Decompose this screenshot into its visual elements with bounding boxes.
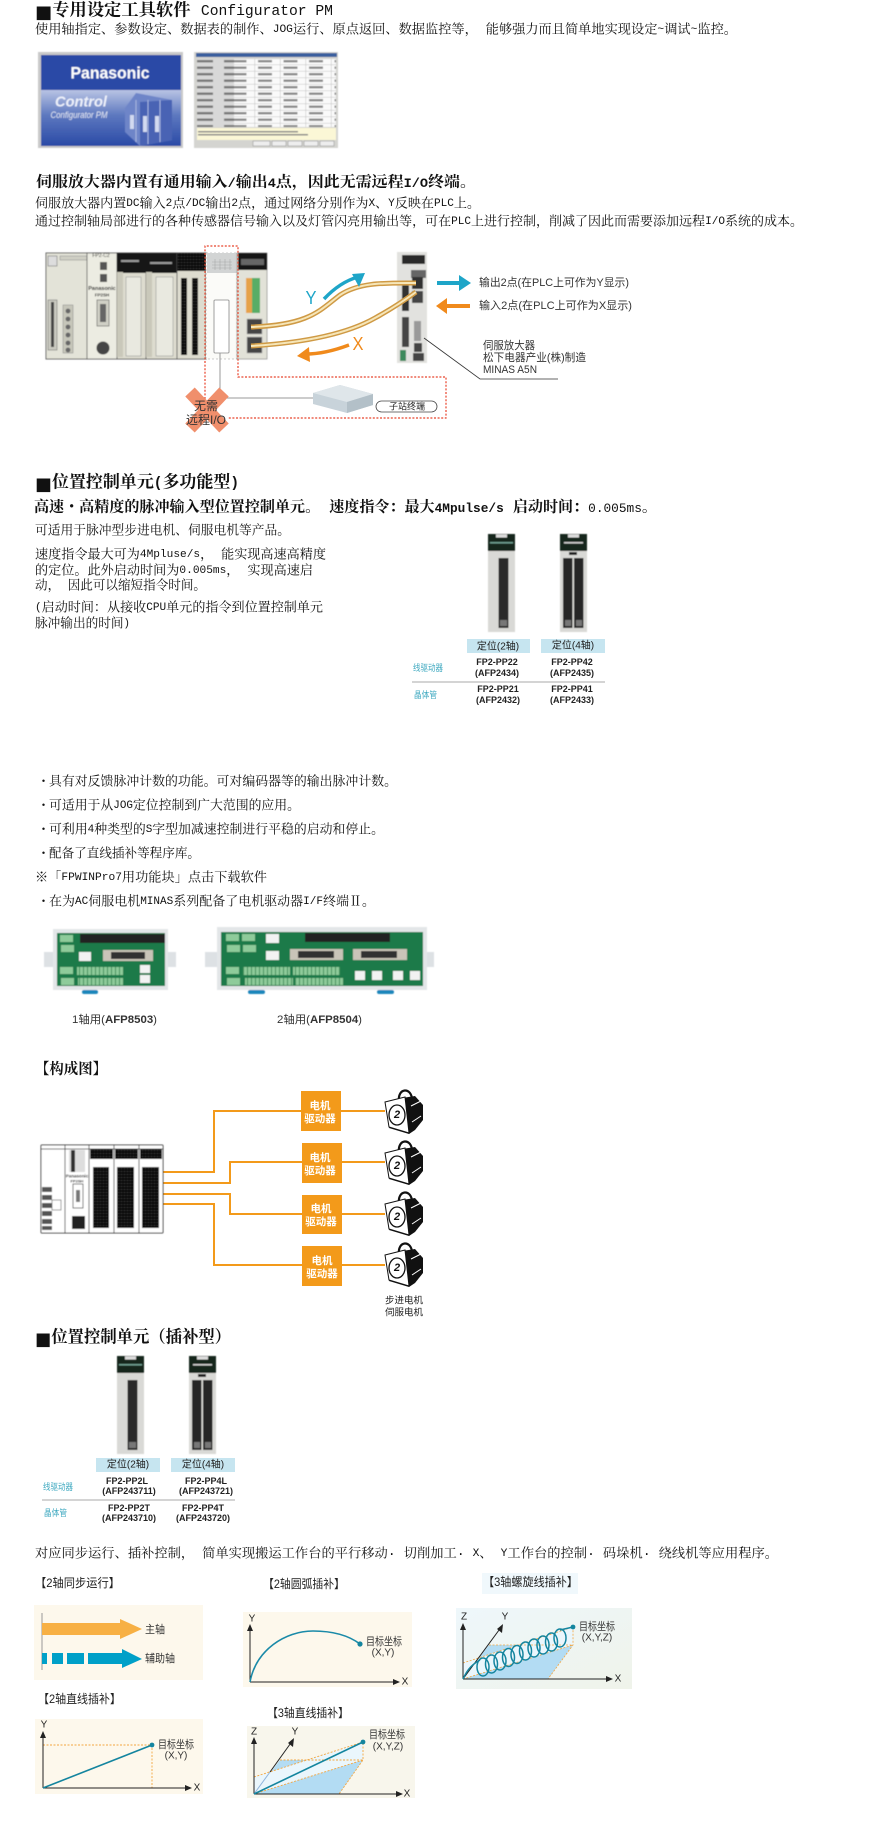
motor driver 4: [302, 1246, 342, 1286]
text: speed description: 动， 因此可以缩短指令时间。: [35, 578, 206, 594]
text: speed description: 速度指令最大可为4Mpluse/s， 能实现高速高精度: [35, 546, 326, 562]
heading: Configurator PM: ■专用设定工具软件 Configurator PM: [35, 0, 333, 24]
icon: motor 2: 2: [393, 1160, 400, 1172]
panel: 2-axis linear interpolation: 【2轴直线插补】: [38, 1691, 121, 1706]
module photo: 4-axis: [189, 1356, 216, 1454]
image: Panasonic Control Configurator PM package: [38, 52, 183, 148]
row: line driver: [43, 1476, 233, 1496]
motor driver 2: [302, 1143, 342, 1183]
motor driver 1: 电机: [310, 1099, 331, 1112]
motor driver 2: 驱动器: [304, 1164, 336, 1177]
panel: 3-axis helical interpolation: (X,Y,Z): [582, 1632, 612, 1644]
arrow: auxiliary axis: [42, 1649, 142, 1668]
panel: 3-axis linear interpolation: Z: [251, 1726, 257, 1738]
servo amplifier: [397, 252, 427, 363]
diagram: PLC to servo amplifier wiring: [46, 246, 632, 428]
panel: 3-axis helical interpolation: [456, 1573, 632, 1689]
heading: servo amplifier I/O: 伺服放大器内置有通用输入 /输出4点，因此无需远程 I/O终端。: [36, 172, 476, 192]
text: startup time note: [35, 600, 323, 632]
caption: motor types: 伺服电机: [385, 1306, 423, 1318]
caption: motor types: 步进电机: [385, 1294, 423, 1306]
panel: 3-axis linear interpolation: (X,Y,Z): [373, 1742, 403, 1752]
PLC: Panasonic: [66, 1174, 89, 1178]
white module with dashed outline: [206, 253, 237, 359]
tag: 4-axis: [541, 638, 605, 653]
arrow: Y output: [306, 273, 365, 308]
connector lines and red dashed boundary: [205, 246, 446, 418]
panel: 3-axis helical interpolation: X: [615, 1674, 622, 1684]
motor driver 1: 驱动器: [304, 1112, 336, 1125]
row: transistor: FP2-PP2T: [108, 1503, 151, 1513]
tag: 2-axis: 定位(2轴): [477, 640, 519, 652]
panel: 3-axis helical interpolation: Y: [502, 1612, 509, 1622]
row: transistor: FP2-PP21: [477, 684, 519, 694]
callout: servo amplifier model: 松下电器产业(株)制造: [483, 350, 586, 364]
icon: motor 1: 2: [393, 1109, 400, 1121]
callout: servo amplifier model: MINAS A5N: [483, 364, 537, 376]
feature list: 可适用于从JOG定位控制到广大范围的应用。: [49, 798, 300, 814]
module photo: 4-axis: [560, 534, 587, 632]
motor driver 1: [301, 1091, 341, 1131]
text: startup time note: 脉冲输出的时间): [35, 616, 130, 632]
PLC: FP2SH: [71, 1178, 84, 1184]
wiring: [163, 1111, 385, 1265]
text: speed description: 的定位。此外启动时间为0.005ms， 实现高速启: [35, 562, 313, 578]
PLC rack: Panasonic: [88, 286, 116, 292]
callout: servo amplifier model: 伺服放大器: [483, 338, 535, 352]
motor driver 3: 电机: [310, 1202, 332, 1215]
image: Panasonic Control Configurator PM package: Panasonic: [70, 64, 150, 82]
panel: 3-axis helical interpolation: Z: [461, 1612, 467, 1622]
feature list: 在为AC伺服电机MINAS系列配备了电机驱动器I/F终端Ⅱ。: [49, 894, 375, 910]
motor driver 3: 驱动器: [305, 1215, 337, 1228]
motor driver 3: [302, 1195, 342, 1234]
icon: no remote I/O cross: 远程I/O: [186, 412, 226, 427]
product table: interpolation units: [42, 1356, 235, 1523]
arrow: Y output: Y: [306, 288, 316, 308]
panel: 2-axis arc interpolation: (X,Y): [372, 1648, 394, 1658]
text: speed description: [35, 546, 326, 594]
text: interpolation applications: 对应同步运行、插补控制， 简单实现搬运工作台的平行移动· 切削加工· X、 Y工作台的控制· 码垛机· 绕线机等应用程序。: [35, 1546, 778, 1562]
tag: 4-axis: 定位(4轴): [182, 1458, 224, 1470]
caption: 2-axis board: 2轴用(AFP8504): [277, 1012, 362, 1026]
panel: 2-axis linear interpolation: Y: [41, 1720, 48, 1730]
icon: no remote I/O cross: [186, 392, 226, 428]
row: transistor: [414, 684, 594, 705]
panel: 2-axis linear interpolation: (X,Y): [165, 1750, 187, 1762]
panel: 2-axis linear interpolation: 目标坐标: [158, 1737, 194, 1751]
arrow: main axis: [42, 1619, 142, 1639]
icon: motor 3: 2: [393, 1211, 400, 1223]
label: main axis: 主轴: [145, 1622, 165, 1636]
row: line driver: 线驱动器: [43, 1481, 73, 1492]
motor driver 4: 驱动器: [306, 1267, 338, 1280]
terminal board: 1-axis: [44, 929, 176, 994]
arrow: X input: [297, 334, 364, 362]
tag: 4-axis: [171, 1458, 235, 1472]
panel: 2-axis linear interpolation: [35, 1691, 203, 1794]
panel: 3-axis linear interpolation: X: [404, 1788, 411, 1800]
text: input label: 输入2点(在PLC上可作为X显示): [479, 298, 632, 312]
feature list: ・: [37, 798, 50, 814]
panel: 2-axis arc interpolation: X: [402, 1676, 409, 1688]
feature list: 可利用4种类型的S字型加减速控制进行平稳的启动和停止。: [49, 822, 384, 838]
cables: [251, 283, 416, 346]
callout: servo amplifier model: [424, 338, 586, 379]
arrow: X input: X: [352, 334, 364, 354]
PLC: [41, 1145, 163, 1233]
image: Panasonic Control Configurator PM package: Control: [55, 94, 108, 110]
feature list: ・: [37, 846, 50, 862]
terminal board: 2-axis: [205, 927, 434, 994]
image: Panasonic Control Configurator PM package: Configurator PM: [50, 110, 108, 120]
feature list: ※「FPWINPro7用功能块」点击下载软件: [35, 870, 267, 886]
row: line driver: (AFP243721): [179, 1486, 233, 1496]
product table: multifunction units: [412, 534, 605, 705]
feature list: [35, 774, 397, 910]
image: configuration software screenshot: [194, 52, 338, 148]
row: transistor: (AFP2433): [550, 695, 594, 705]
icon: motor 4: [385, 1243, 423, 1287]
feature list: 配备了直线插补等程序库。: [49, 846, 200, 862]
PLC rack: [46, 253, 206, 359]
icon: motor 3: [385, 1192, 423, 1236]
motor driver 2: 电机: [310, 1151, 331, 1164]
feature list: 具有对反馈脉冲计数的功能。可对编码器等的输出脉冲计数。: [49, 774, 397, 790]
tag: 2-axis: 定位(2轴): [107, 1458, 149, 1470]
row: transistor: FP2-PP41: [551, 684, 593, 694]
label: auxiliary axis: 辅助轴: [145, 1651, 175, 1665]
row: line driver: 线驱动器: [413, 662, 443, 673]
icon: motor 1: [385, 1090, 423, 1134]
motor driver 4: 电机: [312, 1254, 333, 1267]
panel: 3-axis linear interpolation: Y: [292, 1726, 299, 1738]
diagram: system configuration: [41, 1090, 423, 1318]
arrow: input 2 points: [436, 298, 470, 314]
row: line driver: FP2-PP42: [551, 657, 593, 667]
terminal module: [237, 253, 267, 359]
text: output label: 输出2点(在PLC上可作为Y显示): [479, 275, 629, 289]
heading: interpolation positioning unit: ■位置控制单元（插补型）: [35, 1326, 231, 1352]
row: transistor: (AFP2432): [476, 695, 520, 705]
panel: 3-axis linear interpolation: 目标坐标: [369, 1727, 405, 1741]
panel: 2-axis arc interpolation: [243, 1576, 412, 1688]
row: line driver: FP2-PP2L: [106, 1476, 149, 1486]
label: slave terminal: [376, 400, 437, 412]
icon: motor 2: [385, 1141, 423, 1185]
row: line driver: FP2-PP4L: [185, 1476, 228, 1486]
row: line driver: (AFP243711): [102, 1486, 156, 1496]
text: servo amplifier description line 1: 伺服放大器内置DC输入2点/DC输出2点，通过网络分别作为X、Y反映在PLC上。: [35, 196, 480, 212]
subheading: high speed pulse input: 高速・高精度的脉冲输入型位置控制单元。 速度指令：最大4Mpulse/s 启动时间：0.005ms。: [34, 498, 657, 516]
row: line driver: (AFP2434): [475, 668, 519, 678]
panel: 2-axis synchronous: [34, 1575, 203, 1680]
row: line driver: FP2-PP22: [476, 657, 518, 667]
arrow: output 2 points: [437, 275, 471, 291]
module photo: 2-axis: [488, 534, 515, 632]
label: slave terminal: 子站终端: [389, 400, 425, 412]
row: transistor: 晶体管: [414, 689, 437, 700]
tag: 2-axis: [96, 1458, 160, 1472]
heading: configuration diagram: 【构成图】: [35, 1060, 107, 1078]
icon: no remote I/O cross: 无需: [194, 399, 218, 413]
heading: multifunction positioning unit: ■位置控制单元(多功能型): [35, 472, 239, 496]
panel: 2-axis arc interpolation: 目标坐标: [366, 1634, 402, 1648]
panel: 3-axis linear interpolation: 【3轴直线插补】: [267, 1705, 349, 1720]
panel: 3-axis linear interpolation: [247, 1705, 415, 1800]
text: Configurator PM description: 使用轴指定、参数设定、数据表的制作、 JOG运行、原点返回、数据监控等， 能够强力而且简单地实现设定 ~调试~监控。: [35, 22, 737, 38]
panel: 2-axis synchronous: 【2轴同步运行】: [35, 1575, 120, 1590]
module photo: 2-axis: [117, 1356, 144, 1454]
tag: 4-axis: 定位(4轴): [552, 638, 594, 652]
feature list: ・: [37, 894, 50, 910]
caption: 1-axis board: 1轴用(AFP8503): [72, 1012, 157, 1026]
PLC rack: FP2-C2: [92, 253, 110, 259]
text: startup time note: (启动时间：从接收CPU单元的指令到位置控制单元: [35, 600, 323, 616]
remote terminal box: [313, 385, 373, 413]
panel: 3-axis helical interpolation: 【3轴螺旋线插补】: [483, 1574, 578, 1589]
text: servo amplifier description line 2: 通过控制轴局部进行的各种传感器信号输入以及灯管闪亮用输出等，可在PLC上进行控制，削减了因此而需要添加远程I/O系统的成本。: [35, 214, 803, 230]
PLC rack: FP2SH: [95, 292, 109, 298]
feature list: ・: [37, 822, 50, 838]
row: transistor: [44, 1503, 230, 1523]
row: transistor: 晶体管: [44, 1507, 67, 1518]
row: transistor: (AFP243710): [102, 1513, 156, 1523]
row: transistor: FP2-PP4T: [182, 1503, 225, 1513]
panel: 3-axis helical interpolation: 目标坐标: [579, 1619, 615, 1633]
row: transistor: (AFP243720): [176, 1513, 230, 1523]
icon: motor 4: 2: [393, 1262, 400, 1274]
tag: 2-axis: [467, 639, 530, 653]
panel: 2-axis linear interpolation: X: [194, 1782, 201, 1794]
row: line driver: (AFP2435): [550, 668, 594, 678]
panel: 2-axis arc interpolation: 【2轴圆弧插补】: [263, 1576, 345, 1591]
feature list: ・: [37, 774, 50, 790]
caption: motor types: [385, 1294, 423, 1318]
panel: 2-axis arc interpolation: Y: [249, 1614, 256, 1624]
text: applicable motors: 可适用于脉冲型步进电机、伺服电机等产品。: [35, 522, 290, 538]
row: line driver: [413, 657, 594, 678]
